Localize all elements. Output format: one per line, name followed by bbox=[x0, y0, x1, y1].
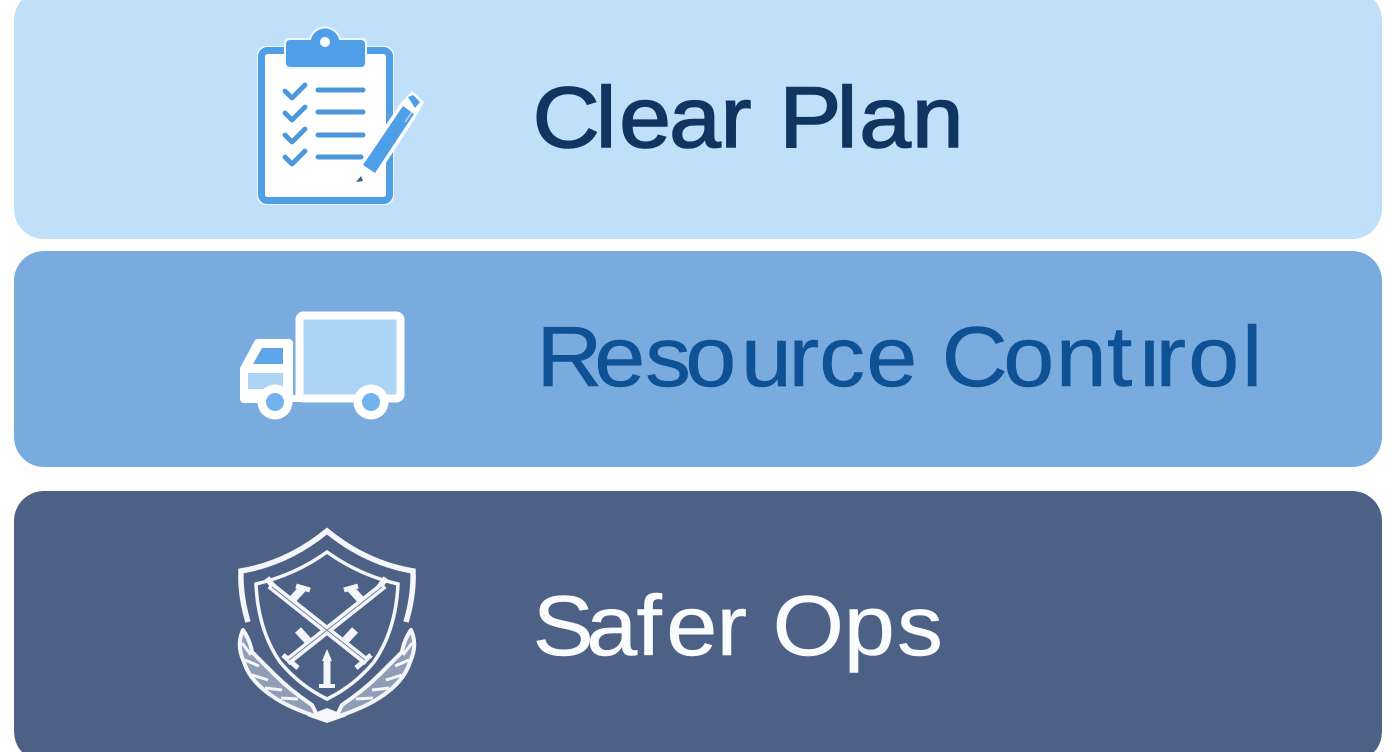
laurel: left branch bbox=[240, 630, 318, 717]
icon: clipboard with checklist and pencil bbox=[257, 26, 424, 205]
laurel: right branch bbox=[336, 630, 414, 717]
panel: safer ops bbox=[14, 491, 1382, 752]
heading: clear plan: Clear Plan bbox=[533, 69, 964, 165]
panel: clear plan bbox=[14, 0, 1382, 239]
icon: delivery truck bbox=[244, 316, 400, 420]
heading: resource control: Resource Contırol bbox=[536, 309, 1262, 404]
heading: safer ops: Safer Ops bbox=[533, 578, 943, 673]
panel: resource control bbox=[14, 251, 1382, 467]
icon: shield with crossed keys and laurel bbox=[240, 531, 414, 723]
